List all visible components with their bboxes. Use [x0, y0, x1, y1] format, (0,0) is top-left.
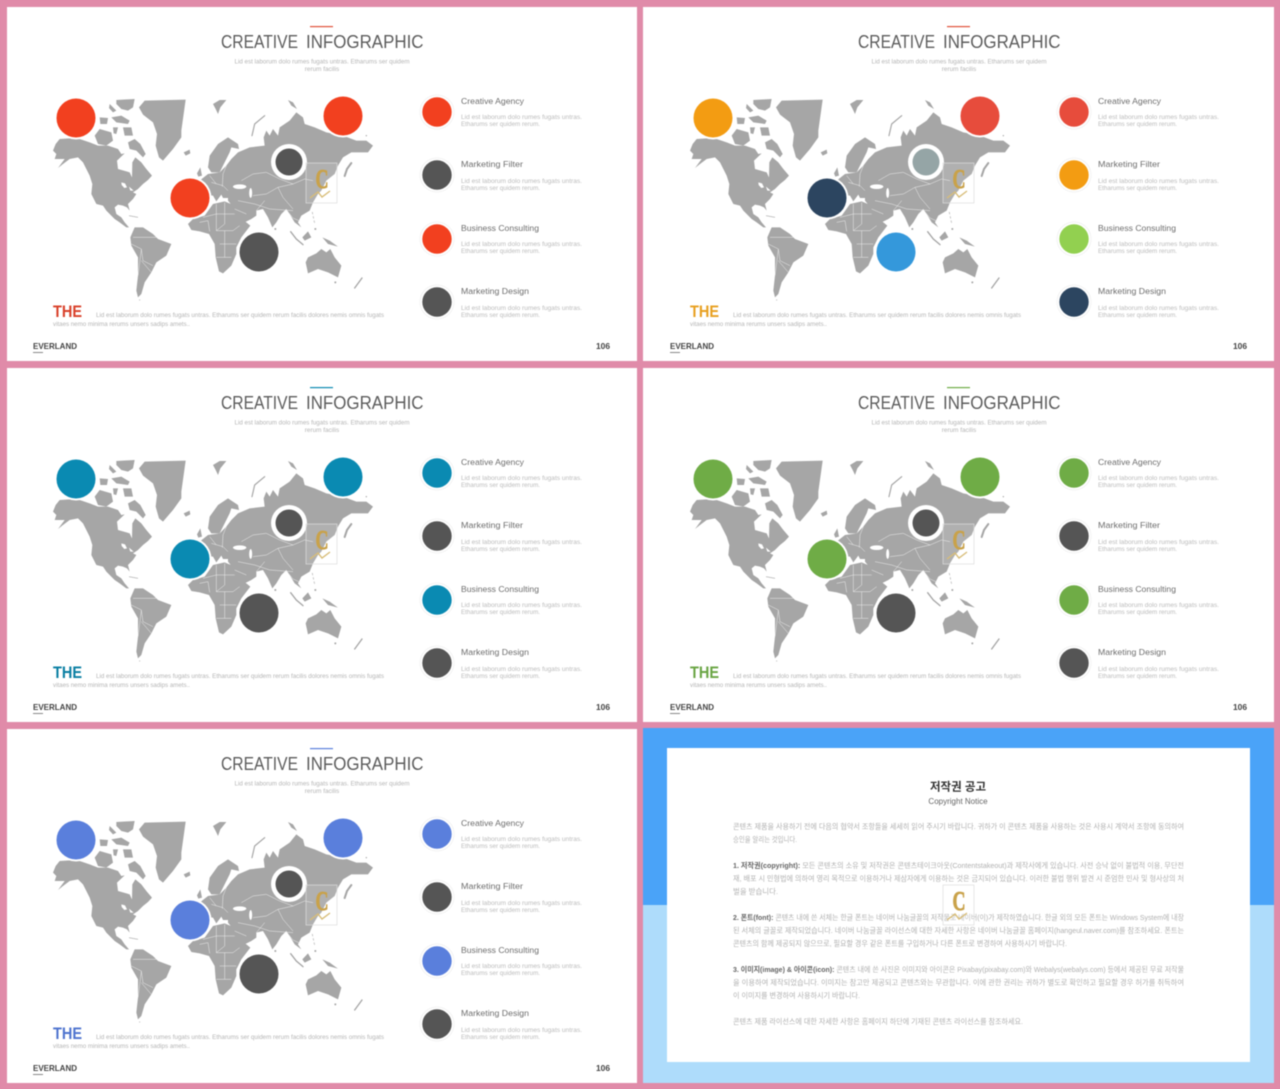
caption: Lid est laborum dolo rumes fugats untras. Etharums ser quidem rerum facilis dolores nemis omnis fugats [96, 673, 384, 680]
title: INFOGRAPHIC [306, 31, 424, 52]
caption: THE [53, 664, 82, 682]
notice: copyright: 1. 저작권(copyright): 모든 콘텐츠의 소유 및 저작권은 콘텐츠테이크아웃(Contentstakeout)과 제작사에게 있습니다. 사전 승낙 없이 불법적 이용, 무단전 [733, 860, 1184, 870]
legend: Etharums ser quidem rerum. [461, 673, 540, 680]
watermark: C [952, 164, 966, 194]
notice heading: Copyright Notice [928, 797, 988, 806]
caption: vitaes nemo minima rerums unsers sadips amets.. [53, 1043, 190, 1050]
legend: Lid est laborum dolo rumes fugats untras. [461, 666, 582, 673]
map markers [54, 816, 364, 996]
watermark: C [952, 886, 966, 916]
legend: Marketing Design [461, 286, 529, 296]
legend: Marketing Design [461, 647, 529, 657]
title [221, 387, 424, 413]
legend: Lid est laborum dolo rumes fugats untras. [461, 305, 582, 312]
title: CREATIVE [221, 31, 298, 52]
subtitle: rerum facilis [305, 427, 339, 434]
legend: Creative Agency [461, 96, 525, 106]
subtitle: rerum facilis [942, 66, 976, 73]
footer [33, 341, 610, 353]
footer: 106 [596, 341, 610, 351]
notice closing: 콘텐츠 제품 라이선스에 대한 자세한 사항은 홈페이지 하단에 기재된 콘텐츠 라이선스를 참조하세요. [733, 1016, 1023, 1026]
title: INFOGRAPHIC [306, 392, 424, 413]
world map [53, 460, 373, 662]
legend: Etharums ser quidem rerum. [1098, 482, 1177, 489]
notice: font: 2. 폰트(font): 콘텐츠 내에 쓴 서체는 한글 폰트는 네이버 나눔글꼴의 저작물로 네이버(이)가 제작하였습니다. 한글 외의 모든 폰트는 Windows System에 내장 [733, 912, 1184, 922]
caption: Lid est laborum dolo rumes fugats untras. Etharums ser quidem rerum facilis dolores nemis omnis fugats [733, 312, 1021, 319]
footer [670, 702, 1247, 714]
caption: THE [53, 303, 82, 321]
watermark [943, 524, 974, 564]
caption [53, 303, 384, 328]
map markers [692, 94, 1002, 274]
panel: green slide [643, 368, 1274, 722]
legend [1057, 95, 1219, 319]
panel: red slide [7, 7, 637, 361]
notice intro [733, 821, 1184, 844]
legend: Lid est laborum dolo rumes fugats untras. [461, 475, 582, 482]
title: CREATIVE [221, 392, 298, 413]
panel: multicolor slide [643, 7, 1274, 361]
subtitle: Lid est laborum dolo rumes fugats untras. Etharums ser quidem [234, 58, 410, 66]
legend: Lid est laborum dolo rumes fugats untras. [461, 602, 582, 609]
legend: Lid est laborum dolo rumes fugats untras. [1098, 178, 1219, 185]
legend: Etharums ser quidem rerum. [1098, 121, 1177, 128]
legend: Business Consulting [1098, 584, 1176, 594]
notice heading [928, 780, 988, 806]
notice heading: 저작권 공고 [930, 780, 986, 794]
footer: EVERLAND [33, 341, 77, 351]
title [858, 387, 1060, 413]
legend [420, 95, 582, 319]
caption [53, 664, 384, 689]
subtitle: Lid est laborum dolo rumes fugats untras. Etharums ser quidem [234, 420, 410, 426]
map markers [54, 456, 364, 634]
notice: copyright: 재, 배포 시 민형법에 의하여 영리 목적으로 이용하거나 제삼자에게 이용하는 것은 금지되어 있습니다. 이러한 불법 행위 발견 시 준엄한 민사 및 형사상의 처 [733, 873, 1184, 883]
legend: Lid est laborum dolo rumes fugats untras. [1098, 666, 1219, 673]
caption: vitaes nemo minima rerums unsers sadips amets.. [690, 321, 827, 328]
footer: 106 [1233, 341, 1247, 351]
subtitle [872, 420, 1046, 434]
subtitle: Lid est laborum dolo rumes fugats untras. Etharums ser quidem [234, 780, 410, 788]
title: INFOGRAPHIC [943, 392, 1060, 413]
title: INFOGRAPHIC [306, 753, 424, 774]
legend: Etharums ser quidem rerum. [461, 1034, 540, 1041]
legend: Lid est laborum dolo rumes fugats untras. [1098, 539, 1219, 546]
footer: EVERLAND [670, 702, 714, 712]
subtitle: Lid est laborum dolo rumes fugats untras. Etharums ser quidem [872, 420, 1046, 426]
legend: Marketing Filter [461, 159, 523, 169]
legend: Lid est laborum dolo rumes fugats untras. [1098, 602, 1219, 609]
legend [1057, 456, 1219, 680]
map markers [692, 456, 1002, 634]
legend: Lid est laborum dolo rumes fugats untras. [461, 836, 582, 843]
title: CREATIVE [858, 392, 935, 413]
legend: Etharums ser quidem rerum. [1098, 312, 1177, 319]
panel: teal slide [7, 368, 637, 722]
panel: copyright notice [643, 728, 1274, 1083]
subtitle [234, 420, 410, 434]
legend: Etharums ser quidem rerum. [1098, 609, 1177, 616]
legend: Etharums ser quidem rerum. [461, 970, 540, 977]
legend: Etharums ser quidem rerum. [461, 248, 540, 255]
legend: Etharums ser quidem rerum. [461, 546, 540, 553]
notice: copyright: 벌을 받습니다. [733, 886, 778, 896]
legend: Lid est laborum dolo rumes fugats untras. [1098, 475, 1219, 482]
caption: THE [53, 1025, 82, 1043]
caption [690, 303, 1021, 328]
caption: THE [690, 303, 719, 321]
footer: 106 [596, 702, 610, 712]
footer [670, 341, 1247, 353]
caption [690, 664, 1021, 689]
caption: vitaes nemo minima rerums unsers sadips amets.. [53, 682, 190, 689]
watermark: C [316, 164, 328, 194]
legend: Lid est laborum dolo rumes fugats untras. [461, 963, 582, 970]
caption: Lid est laborum dolo rumes fugats untras. Etharums ser quidem rerum facilis dolores nemis omnis fugats [96, 1034, 384, 1041]
map markers [54, 94, 364, 274]
legend: Business Consulting [1098, 223, 1176, 233]
subtitle: rerum facilis [305, 788, 339, 795]
legend: Lid est laborum dolo rumes fugats untras. [461, 114, 582, 121]
panel: blue slide [7, 729, 637, 1083]
title [221, 748, 424, 774]
watermark [306, 163, 337, 203]
watermark [306, 885, 337, 925]
legend: Creative Agency [1098, 457, 1162, 467]
legend: Lid est laborum dolo rumes fugats untras. [1098, 114, 1219, 121]
notice: font [733, 912, 1184, 948]
footer: EVERLAND [33, 1063, 77, 1073]
legend: Etharums ser quidem rerum. [1098, 185, 1177, 192]
caption: Lid est laborum dolo rumes fugats untras. Etharums ser quidem rerum facilis dolores nemis omnis fugats [733, 673, 1021, 680]
legend: Etharums ser quidem rerum. [461, 907, 540, 914]
footer [33, 702, 610, 714]
watermark [306, 524, 337, 564]
legend: Etharums ser quidem rerum. [461, 312, 540, 319]
title: INFOGRAPHIC [943, 31, 1060, 52]
footer [33, 1063, 610, 1075]
notice: image and icon: 이 이미지를 변경하여 사용하시기 바랍니다. [733, 990, 860, 1000]
legend: Lid est laborum dolo rumes fugats untras. [461, 1027, 582, 1034]
legend: Marketing Filter [1098, 520, 1160, 530]
legend [420, 456, 582, 680]
subtitle: Lid est laborum dolo rumes fugats untras. Etharums ser quidem [872, 58, 1046, 66]
legend: Lid est laborum dolo rumes fugats untras. [1098, 241, 1219, 248]
title: CREATIVE [221, 753, 298, 774]
caption: vitaes nemo minima rerums unsers sadips amets.. [690, 682, 827, 689]
notice: image and icon: 을 이용하여 제작되었습니다. 이미지는 참고만 제공되고 콘텐츠와는 무관합니다. 이에 관한 권리는 귀하가 별도로 확인하고 필요할 경우 허가를 취득하여 [733, 977, 1184, 987]
legend: Etharums ser quidem rerum. [461, 121, 540, 128]
caption [53, 1025, 384, 1050]
legend: Etharums ser quidem rerum. [461, 609, 540, 616]
legend: Creative Agency [461, 818, 525, 828]
watermark [943, 163, 974, 203]
legend: Etharums ser quidem rerum. [461, 843, 540, 850]
legend: Marketing Filter [461, 881, 523, 891]
title [858, 26, 1060, 52]
legend: Business Consulting [461, 584, 539, 594]
subtitle: rerum facilis [305, 66, 339, 73]
world map [53, 821, 373, 1023]
title: CREATIVE [858, 31, 935, 52]
legend: Creative Agency [1098, 96, 1162, 106]
notice: font: 콘텐츠의 함께 제공되지 않으므로, 필요할 경우 같은 폰트를 구입하거나 다른 폰트로 변경하여 사용하시기 바랍니다. [733, 938, 1067, 948]
legend: Creative Agency [461, 457, 525, 467]
footer: EVERLAND [33, 702, 77, 712]
footer: EVERLAND [670, 341, 714, 351]
legend: Lid est laborum dolo rumes fugats untras. [1098, 305, 1219, 312]
legend: Lid est laborum dolo rumes fugats untras. [461, 178, 582, 185]
legend: Etharums ser quidem rerum. [461, 482, 540, 489]
footer: 106 [1233, 702, 1247, 712]
notice: image and icon: 3. 이미지(image) & 아이콘(icon): 콘텐츠 내에 쓴 사진은 이미지와 아이콘은 Pixabay(pixabay.com)와 Webalys(webalys.com) 등에서 제공된 무료 저작물 [733, 964, 1184, 974]
legend: Etharums ser quidem rerum. [1098, 248, 1177, 255]
watermark: C [316, 525, 328, 555]
notice: image and icon [733, 964, 1184, 1000]
caption: THE [690, 664, 719, 682]
subtitle: rerum facilis [942, 427, 976, 434]
caption: Lid est laborum dolo rumes fugats untras. Etharums ser quidem rerum facilis dolores nemis omnis fugats [96, 312, 384, 319]
world map [690, 99, 1010, 301]
subtitle [234, 58, 410, 73]
legend: Etharums ser quidem rerum. [1098, 673, 1177, 680]
legend: Etharums ser quidem rerum. [461, 185, 540, 192]
notice: font: 된 서체의 글꼴로 제작되었습니다. 네이버 나눔글꼴 라이선스에 대한 자세한 사항은 네이버 나눔글꼴 홈페이지(hangeul.naver.com)를 참조하세요. 폰트는 [733, 925, 1184, 935]
legend: Etharums ser quidem rerum. [1098, 546, 1177, 553]
legend: Lid est laborum dolo rumes fugats untras. [461, 241, 582, 248]
subtitle [234, 780, 410, 795]
subtitle [872, 58, 1046, 73]
notice intro: 콘텐츠 제품을 사용하기 전에 다음의 협약서 조항들을 세세히 읽어 주시기 바랍니다. 귀하가 이 콘텐츠 제품을 사용하는 것은 사용시 계약서 조항에 동의하여 [733, 821, 1184, 831]
legend: Marketing Design [1098, 647, 1166, 657]
watermark [943, 885, 974, 925]
caption: vitaes nemo minima rerums unsers sadips amets.. [53, 321, 190, 328]
title [221, 26, 424, 52]
notice: copyright [733, 860, 1184, 896]
world map [690, 460, 1010, 662]
legend: Lid est laborum dolo rumes fugats untras. [461, 900, 582, 907]
legend [420, 817, 582, 1041]
watermark: C [316, 886, 328, 916]
legend: Lid est laborum dolo rumes fugats untras. [461, 539, 582, 546]
notice intro: 승인을 알리는 것입니다. [733, 834, 797, 844]
watermark: C [952, 525, 966, 555]
legend: Business Consulting [461, 945, 539, 955]
legend: Business Consulting [461, 223, 539, 233]
world map [53, 99, 373, 301]
footer: 106 [596, 1063, 610, 1073]
legend: Marketing Design [461, 1008, 529, 1018]
legend: Marketing Design [1098, 286, 1166, 296]
legend: Marketing Filter [461, 520, 523, 530]
legend: Marketing Filter [1098, 159, 1160, 169]
